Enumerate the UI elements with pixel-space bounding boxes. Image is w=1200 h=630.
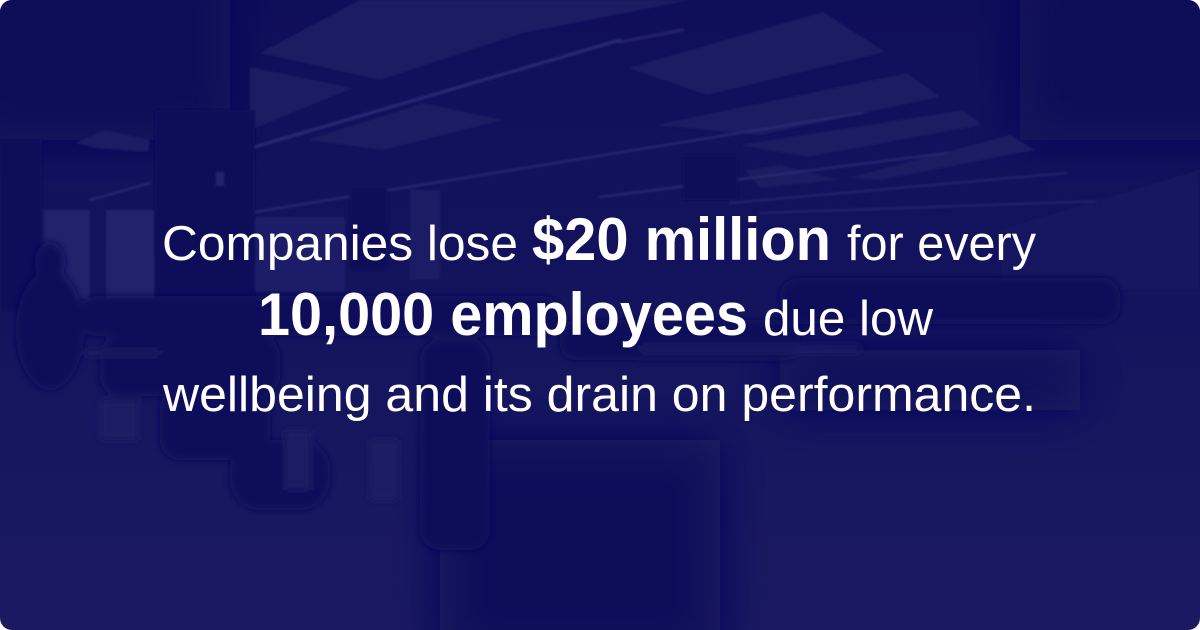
ceiling light strips — [90, 30, 1130, 213]
main statement — [162, 206, 1036, 422]
line 1: for every — [847, 217, 1036, 271]
line 2: 10,000 employees — [258, 281, 748, 348]
columns — [0, 110, 738, 310]
back windows — [44, 190, 440, 300]
right wall — [1098, 199, 1129, 202]
desks and lighter clothing — [85, 345, 860, 500]
line 1: Companies lose — [162, 217, 518, 271]
line 3: wellbeing and its drain on performance. — [162, 368, 1036, 422]
line 1 — [164, 215, 1036, 270]
line 2: due low — [763, 292, 934, 346]
line 1: $20 million — [532, 206, 831, 273]
line 2 — [262, 291, 934, 348]
seated people silhouettes — [16, 242, 1120, 550]
ceiling panels — [250, 0, 1035, 188]
